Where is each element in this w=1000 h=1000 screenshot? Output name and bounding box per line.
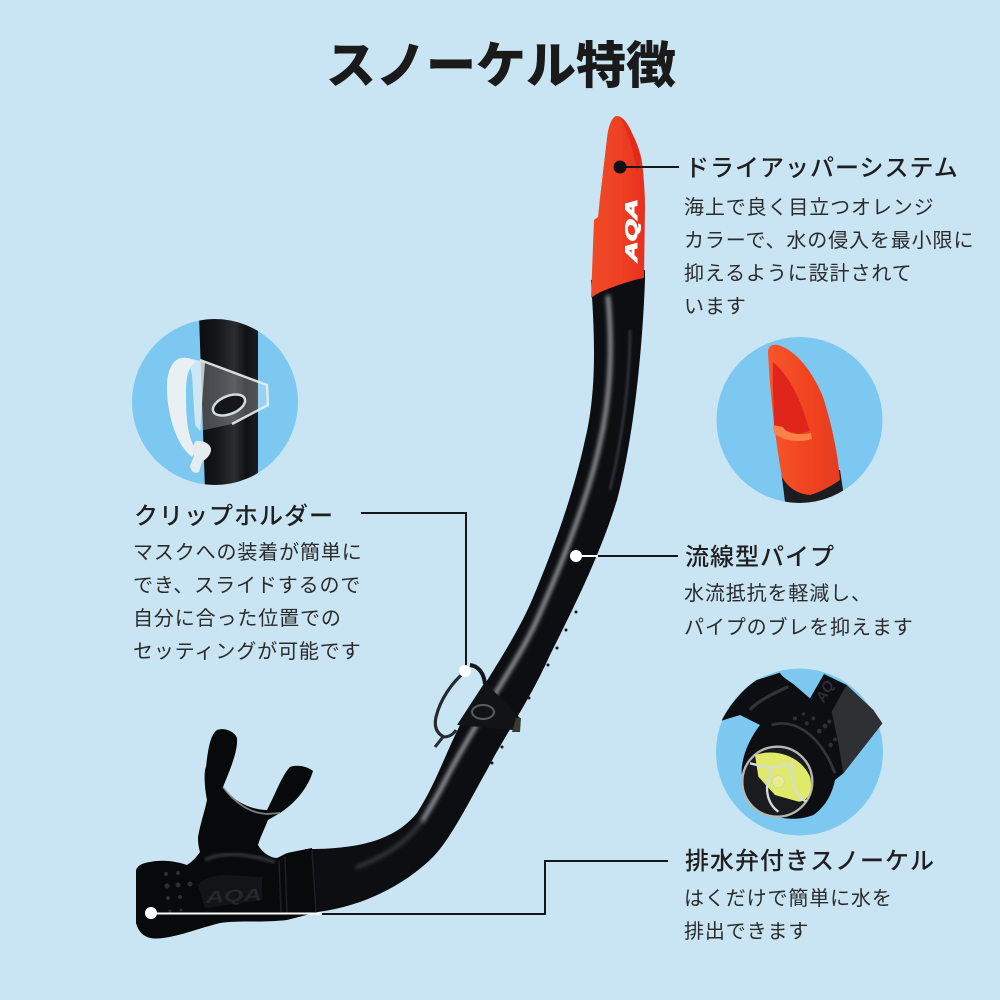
body text: マスクへの装着が簡単に [133,541,363,564]
callout: clip holder [133,503,471,677]
pipe highlight [423,297,610,820]
title: スノーケル特徴 [326,38,676,94]
leader line [145,861,668,919]
body text [684,887,893,943]
body text: 海上で良く目立つオレンジ [684,196,935,219]
pipe: black tube [305,270,645,913]
body text: 排出できます [684,920,809,943]
body text [684,582,914,639]
body text: でき、スライドするので [133,575,361,597]
body text [133,541,363,663]
mouthpiece and purge valve [136,729,318,939]
leader line [361,513,471,677]
body text: カラーで、水の侵入を最小限に [684,229,974,252]
panel: purge valve detail circle [716,668,883,836]
heading: ドライアッパーシステム [685,155,959,182]
body text: います [684,296,747,318]
AQA moulded logo: AQA [204,885,262,907]
pipe ridge nubs [490,610,578,764]
panel: purge valve detail circle: AQ [813,678,838,706]
AQA logo: AQA [622,199,641,264]
panel: clip holder detail circle [132,315,298,490]
callout: streamlined pipe [570,544,914,639]
clip holder [435,665,521,747]
heading: 排水弁付きスノーケル [685,848,935,875]
heading: クリップホルダー [134,503,334,530]
body text: 水流抵抗を軽減し、 [684,582,872,605]
heading: 流線型パイプ [685,544,835,571]
body text: パイプのブレを抑えます [684,615,914,639]
snorkel illustration [136,116,645,939]
body text: セッティングが可能です [133,640,361,663]
body text [684,196,974,318]
panel: orange tip detail circle [716,337,882,510]
leader line [614,160,679,174]
callout: dry upper system [614,155,974,318]
body text: はくだけで簡単に水を [684,887,893,910]
orange dry top [591,116,645,298]
callout: purge valve snorkel [145,848,935,943]
body text: 抑えるように設計されて [684,262,912,285]
body text: 自分に合った位置での [133,607,342,630]
leader line [570,550,678,562]
